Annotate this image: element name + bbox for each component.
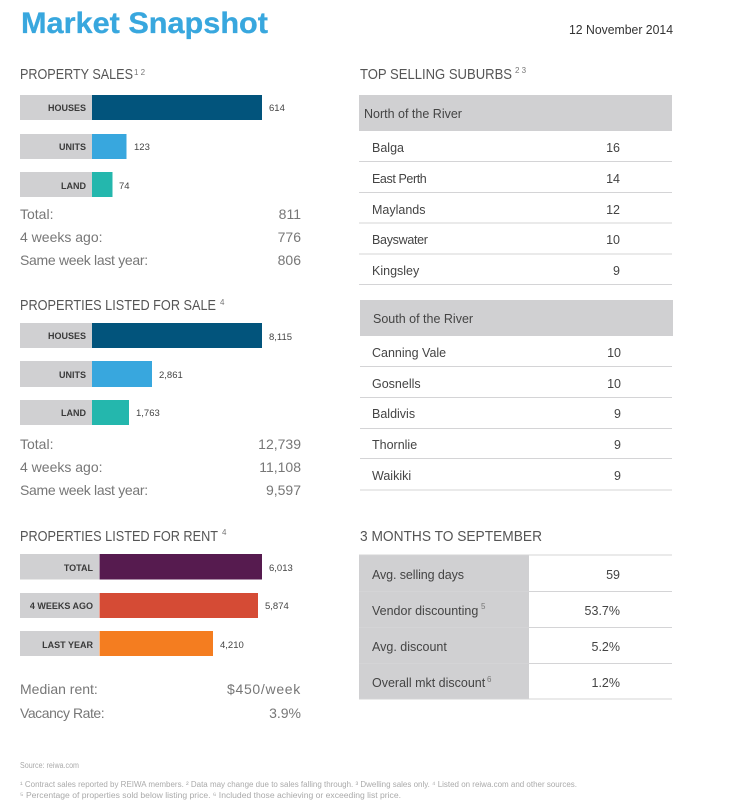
table: 3 months stats: Avg. discount [372, 640, 447, 654]
bar: 4 weeks ago 5,874: 5,874 [265, 601, 289, 612]
table: north of the river: Bayswater [372, 233, 428, 247]
title: Market Snapshot [21, 7, 268, 40]
table: north of the river: Maylands [372, 203, 426, 217]
bar: land 1,763: 1,763 [136, 408, 160, 419]
bar: last year 4,210: LAST YEAR [42, 640, 93, 650]
table: south of the river: Thornlie [372, 438, 417, 452]
table: 3 months stats: 1.2% [592, 676, 620, 690]
stats: rent: 3.9% [269, 705, 301, 721]
stats: property sales: Total: [20, 206, 53, 222]
heading: listed for rent: 4 [222, 528, 227, 537]
footnotes: ⁵ Percentage of properties sold below listing price. ⁶ Included those achieving or exceeding list price. [20, 791, 401, 800]
table: 3 months stats: Vendor discounting [372, 604, 478, 618]
heading: top selling suburbs: TOP SELLING SUBURBS [360, 66, 512, 83]
table: south of the river: South of the River [373, 312, 473, 326]
bar: houses 8,115 [20, 323, 292, 348]
table: north of the river: 12 [606, 203, 620, 217]
table: 3 months stats: 6 [487, 675, 492, 684]
table: south of the river: Baldivis [372, 407, 415, 421]
heading: listed for sale: 4 [220, 298, 225, 307]
bar: units 123: 123 [134, 142, 150, 153]
bar: 4 weeks ago 5,874 [20, 593, 289, 618]
bar: units 2,861: UNITS [59, 370, 86, 380]
bar: units 123 [20, 134, 150, 159]
stats: listed for sale: 11,108 [259, 459, 301, 475]
panel: properties listed for rent [20, 528, 301, 721]
heading: property sales: PROPERTY SALES [20, 66, 133, 83]
heading: property sales: 1 2 [134, 68, 146, 77]
heading: top selling suburbs: 2 3 [515, 66, 527, 75]
panel: top selling suburbs [359, 66, 673, 490]
table: south of the river: 9 [614, 469, 621, 483]
table: north of the river: Balga [372, 141, 404, 155]
bar: houses 614: 614 [269, 103, 285, 114]
stats: property sales: 776 [278, 229, 301, 245]
bar: last year 4,210 [20, 631, 244, 656]
bar: units 2,861 [20, 361, 183, 387]
stats: listed for sale: 9,597 [266, 482, 301, 498]
bar: land 74: 74 [119, 181, 130, 192]
table: south of the river: Gosnells [372, 377, 421, 391]
source: Source: reiwa.com [20, 761, 79, 770]
table: 3 months stats: 5.2% [592, 640, 620, 654]
stats: listed for sale: 4 weeks ago: [20, 459, 102, 475]
stats: listed for sale [20, 436, 301, 498]
bar: units 123: UNITS [59, 142, 86, 152]
table: 3 months stats: 59 [606, 568, 620, 582]
bar: 4 weeks ago 5,874: 4 WEEKS AGO [30, 601, 93, 611]
stats: property sales: Same week last year: [20, 252, 148, 268]
table: south of the river: 9 [614, 407, 621, 421]
bar: land 1,763 [20, 400, 160, 425]
table: north of the river: 9 [613, 264, 620, 278]
bar: last year 4,210: 4,210 [220, 640, 244, 651]
table: south of the river: 9 [614, 438, 621, 452]
table: north of the river: East Perth [372, 172, 427, 186]
heading: 3 months: 3 MONTHS TO SEPTEMBER [360, 528, 542, 545]
bar: houses 8,115: 8,115 [269, 332, 292, 343]
panel: property sales [20, 66, 301, 268]
footnotes [20, 780, 577, 800]
table: north of the river: Kingsley [372, 264, 420, 278]
stats: property sales: 806 [278, 252, 301, 268]
date: 12 November 2014 [569, 23, 673, 37]
table: south of the river: Canning Vale [372, 346, 446, 360]
stats: listed for sale: Same week last year: [20, 482, 148, 498]
stats: rent: Median rent: [20, 681, 98, 697]
stats: listed for sale: 12,739 [258, 436, 301, 452]
footnotes: ¹ Contract sales reported by REIWA members. ² Data may change due to sales falling through. ³ Dwelling sales only. ⁴ Listed on reiwa.com and other sources. [20, 780, 577, 789]
table: north of the river [359, 95, 672, 284]
bar: land 74: LAND [61, 181, 86, 191]
heading: listed for rent: PROPERTIES LISTED FOR RENT [20, 528, 218, 545]
bar: total 6,013 [20, 554, 293, 580]
stats: property sales: 811 [279, 206, 301, 222]
table: 3 months stats [359, 555, 672, 699]
table: 3 months stats: 5 [481, 602, 486, 611]
bar: houses 8,115: HOUSES [48, 331, 86, 341]
bar: total 6,013: TOTAL [64, 563, 93, 573]
bar: houses 614: HOUSES [48, 103, 86, 113]
table: south of the river [360, 300, 673, 490]
heading: listed for sale: PROPERTIES LISTED FOR SALE [20, 297, 216, 314]
bar: land 1,763: LAND [61, 408, 86, 418]
table: south of the river: 10 [607, 377, 621, 391]
bar: land 74 [20, 172, 130, 197]
stats: rent: Vacancy Rate: [20, 705, 104, 721]
stats: rent: $450/week [227, 681, 301, 697]
table: north of the river: 10 [606, 233, 620, 247]
table: 3 months stats: Overall mkt discount [372, 676, 486, 690]
stats: property sales [20, 206, 301, 268]
table: 3 months stats: Avg. selling days [372, 568, 464, 582]
stats: rent [20, 681, 301, 721]
table: north of the river: 16 [606, 141, 620, 155]
table: north of the river: North of the River [364, 107, 462, 121]
table: south of the river: 10 [607, 346, 621, 360]
table: 3 months stats: 53.7% [585, 604, 620, 618]
stats: listed for sale: Total: [20, 436, 53, 452]
bar: units 2,861: 2,861 [159, 370, 183, 381]
panel: properties listed for sale [20, 297, 301, 498]
stats: property sales: 4 weeks ago: [20, 229, 102, 245]
bar: total 6,013: 6,013 [269, 563, 293, 574]
table: north of the river: 14 [606, 172, 620, 186]
table: south of the river: Waikiki [372, 469, 411, 483]
bar: houses 614 [20, 95, 285, 120]
panel: 3 months to september [359, 528, 672, 699]
